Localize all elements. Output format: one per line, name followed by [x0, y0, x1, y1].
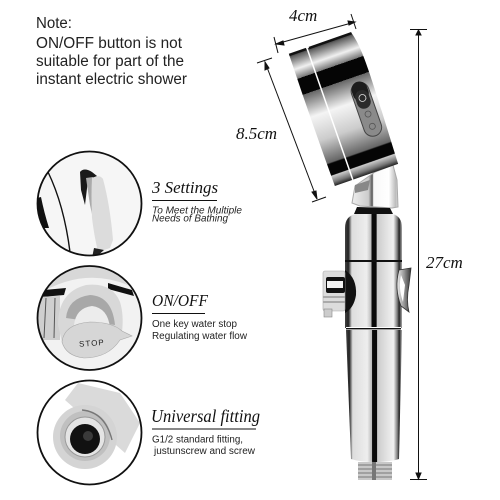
dimension: 8.5cm [236, 58, 326, 202]
shower neck [352, 165, 398, 214]
heading: 3 Settings: 3 Settings [151, 178, 218, 197]
dimension: 4cm [274, 6, 356, 53]
heading: Universal fitting: G1/2 standard fitting, [152, 434, 243, 446]
heading: Universal fitting: justunscrew and screw [153, 446, 256, 457]
note text: instant electric shower [36, 71, 187, 88]
heading: ON/OFF [152, 291, 248, 342]
heading: 3 Settings: Needs of Bathing [152, 212, 228, 224]
heading: Universal fitting [151, 406, 260, 457]
circle: ON/OFF detail: STOP [79, 338, 105, 349]
note text: suitable for part of the [36, 53, 184, 70]
dimension: 27cm: 27cm [426, 253, 463, 272]
heading: 3 Settings: To Meet the Multiple [152, 204, 242, 216]
circle: ON/OFF detail [37, 265, 142, 370]
heading: ON/OFF: ON/OFF [152, 291, 209, 310]
circle: 3 settings detail [37, 151, 142, 258]
shower head [288, 31, 401, 186]
threaded connector [358, 462, 392, 480]
heading: ON/OFF: One key water stop [152, 319, 237, 330]
dimension: 4cm: 4cm [289, 6, 317, 25]
left mounting clip [323, 270, 356, 317]
right mounting clip [397, 268, 411, 312]
note text [36, 15, 187, 88]
heading: Universal fitting: Universal fitting [151, 406, 260, 426]
note text: ON/OFF button is not [36, 35, 183, 52]
dimension: 27cm [410, 30, 463, 480]
note text: Note: [36, 15, 72, 32]
shower handle body [345, 214, 402, 462]
dimension: 8.5cm: 8.5cm [236, 124, 277, 143]
heading: ON/OFF: Regulating water flow [152, 331, 248, 342]
control button panel [348, 79, 384, 139]
circle: universal fitting detail [37, 380, 142, 485]
heading: 3 Settings [151, 178, 242, 224]
